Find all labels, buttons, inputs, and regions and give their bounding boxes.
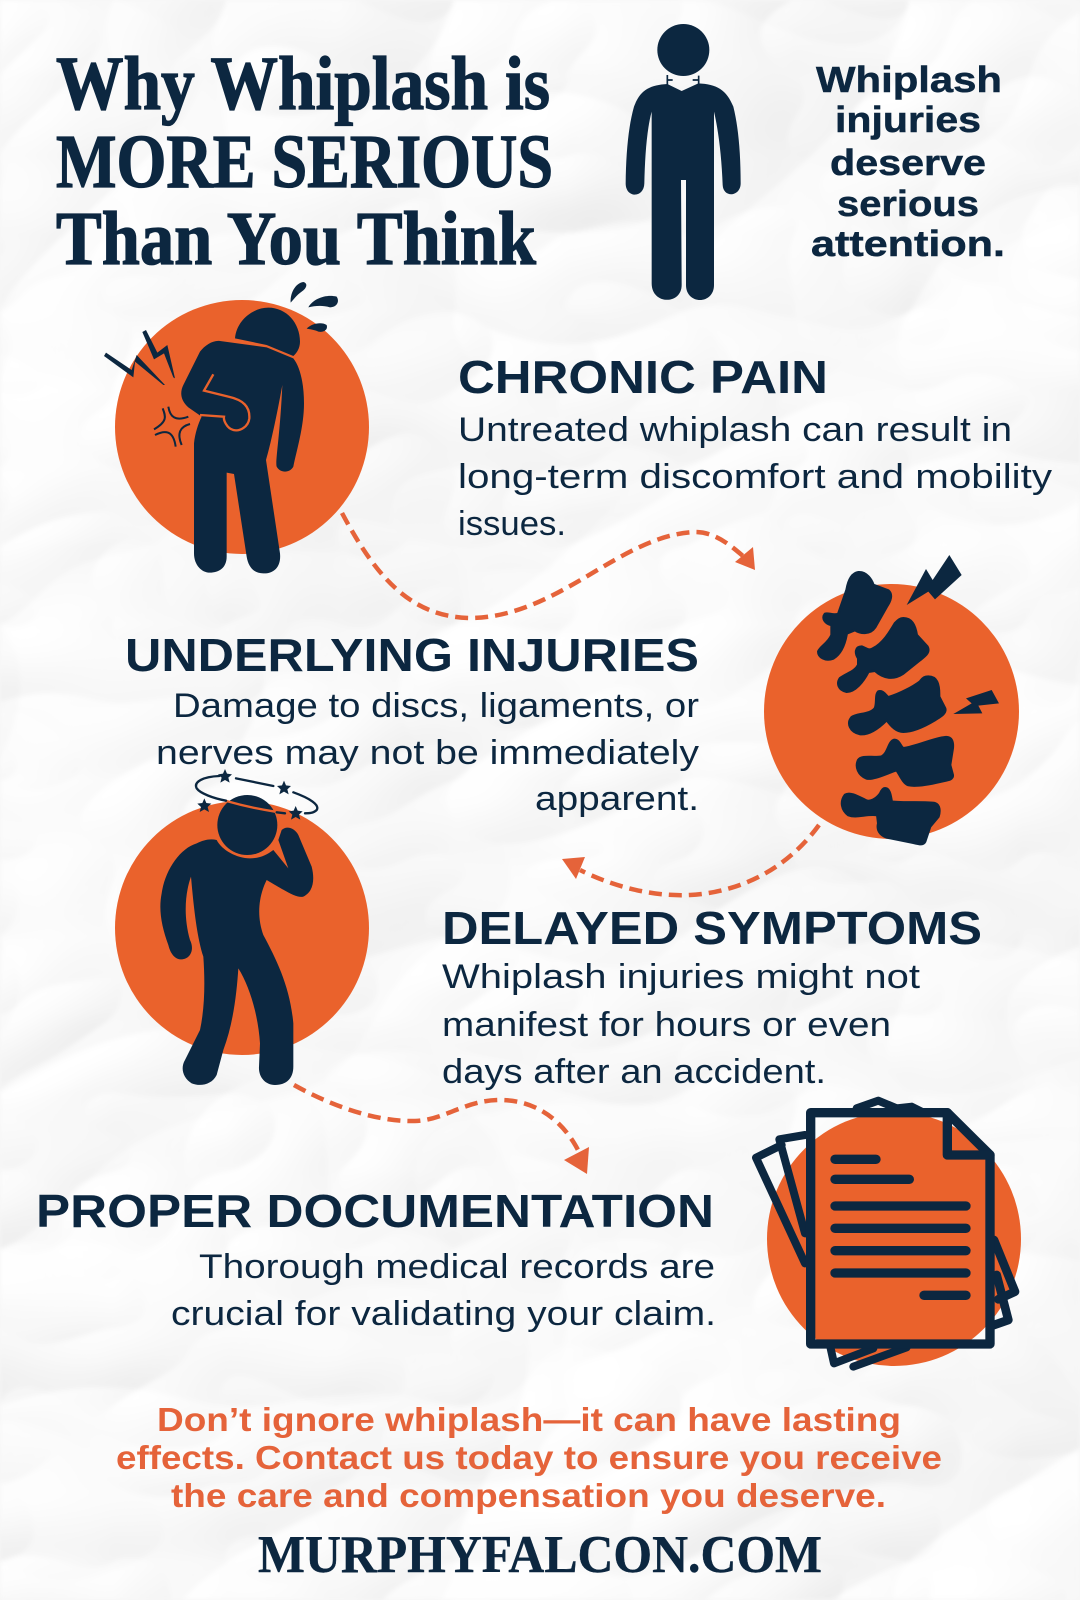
text: delayed symptoms description: days after an accident. bbox=[442, 1053, 826, 1091]
text: delayed symptoms description: Whiplash injuries might not bbox=[442, 958, 921, 996]
text: chronic pain description: long-term discomfort and mobility bbox=[458, 458, 1052, 496]
arrow: underlying injuries to delayed symptoms bbox=[562, 825, 819, 895]
icon: standing figure with neck brace bbox=[626, 24, 741, 300]
icon: dizzy figure with stars bbox=[160, 769, 317, 1085]
text: whiplash injuries deserve serious attention: Whiplash bbox=[816, 59, 1002, 100]
text: chronic pain description: Untreated whiplash can result in bbox=[458, 411, 1012, 449]
call to action: Don’t ignore whiplash—it can have lasting bbox=[157, 1401, 901, 1438]
text: underlying injuries description: nerves may not be immediately bbox=[156, 734, 699, 772]
title: MORE SERIOUS bbox=[56, 120, 553, 204]
text: chronic pain description: issues. bbox=[458, 505, 566, 543]
text: whiplash injuries deserve serious attention: injuries bbox=[835, 99, 981, 140]
text: whiplash injuries deserve serious attention: attention. bbox=[811, 223, 1005, 264]
circle: underlying injuries background bbox=[764, 584, 1019, 839]
call to action: the care and compensation you deserve. bbox=[171, 1477, 886, 1514]
text: proper documentation description bbox=[171, 1248, 716, 1333]
icon: stack of documents bbox=[756, 1101, 1015, 1367]
text: chronic pain description bbox=[458, 411, 1052, 543]
heading: underlying injuries: UNDERLYING INJURIES bbox=[125, 629, 699, 681]
title: Why Whiplash is bbox=[56, 42, 550, 126]
circle: delayed symptoms background bbox=[115, 801, 369, 1055]
circle: proper documentation background bbox=[767, 1112, 1021, 1366]
text: proper documentation description: Thorough medical records are bbox=[199, 1248, 715, 1286]
text: underlying injuries description: Damage to discs, ligaments, or bbox=[173, 687, 699, 725]
text: proper documentation description: crucial for validating your claim. bbox=[171, 1295, 716, 1333]
text: delayed symptoms description: manifest for hours or even bbox=[442, 1006, 891, 1044]
title: Than You Think bbox=[56, 197, 537, 281]
text: delayed symptoms description bbox=[442, 958, 921, 1091]
text: whiplash injuries deserve serious attention: serious bbox=[837, 183, 979, 224]
title bbox=[56, 42, 553, 281]
website: MURPHYFALCON.COM bbox=[258, 1526, 822, 1584]
text: whiplash injuries deserve serious attention: deserve bbox=[830, 142, 986, 183]
arrow: chronic pain to underlying injuries bbox=[342, 513, 755, 618]
text: whiplash injuries deserve serious attention bbox=[811, 59, 1005, 264]
heading: chronic pain: CHRONIC PAIN bbox=[458, 351, 828, 403]
call to action: effects. Contact us today to ensure you receive bbox=[116, 1439, 942, 1476]
heading: proper documentation: PROPER DOCUMENTATION bbox=[36, 1185, 714, 1237]
text: underlying injuries description bbox=[156, 687, 699, 818]
heading: delayed symptoms: DELAYED SYMPTOMS bbox=[442, 902, 982, 954]
arrow: delayed symptoms to proper documentation bbox=[294, 1085, 589, 1174]
circle: chronic pain background bbox=[115, 300, 369, 554]
icon: figure in back pain bbox=[104, 282, 338, 573]
icon: spine vertebrae with lightning bolts bbox=[818, 555, 999, 844]
call to action bbox=[116, 1401, 942, 1514]
text: underlying injuries description: apparent. bbox=[535, 780, 699, 818]
